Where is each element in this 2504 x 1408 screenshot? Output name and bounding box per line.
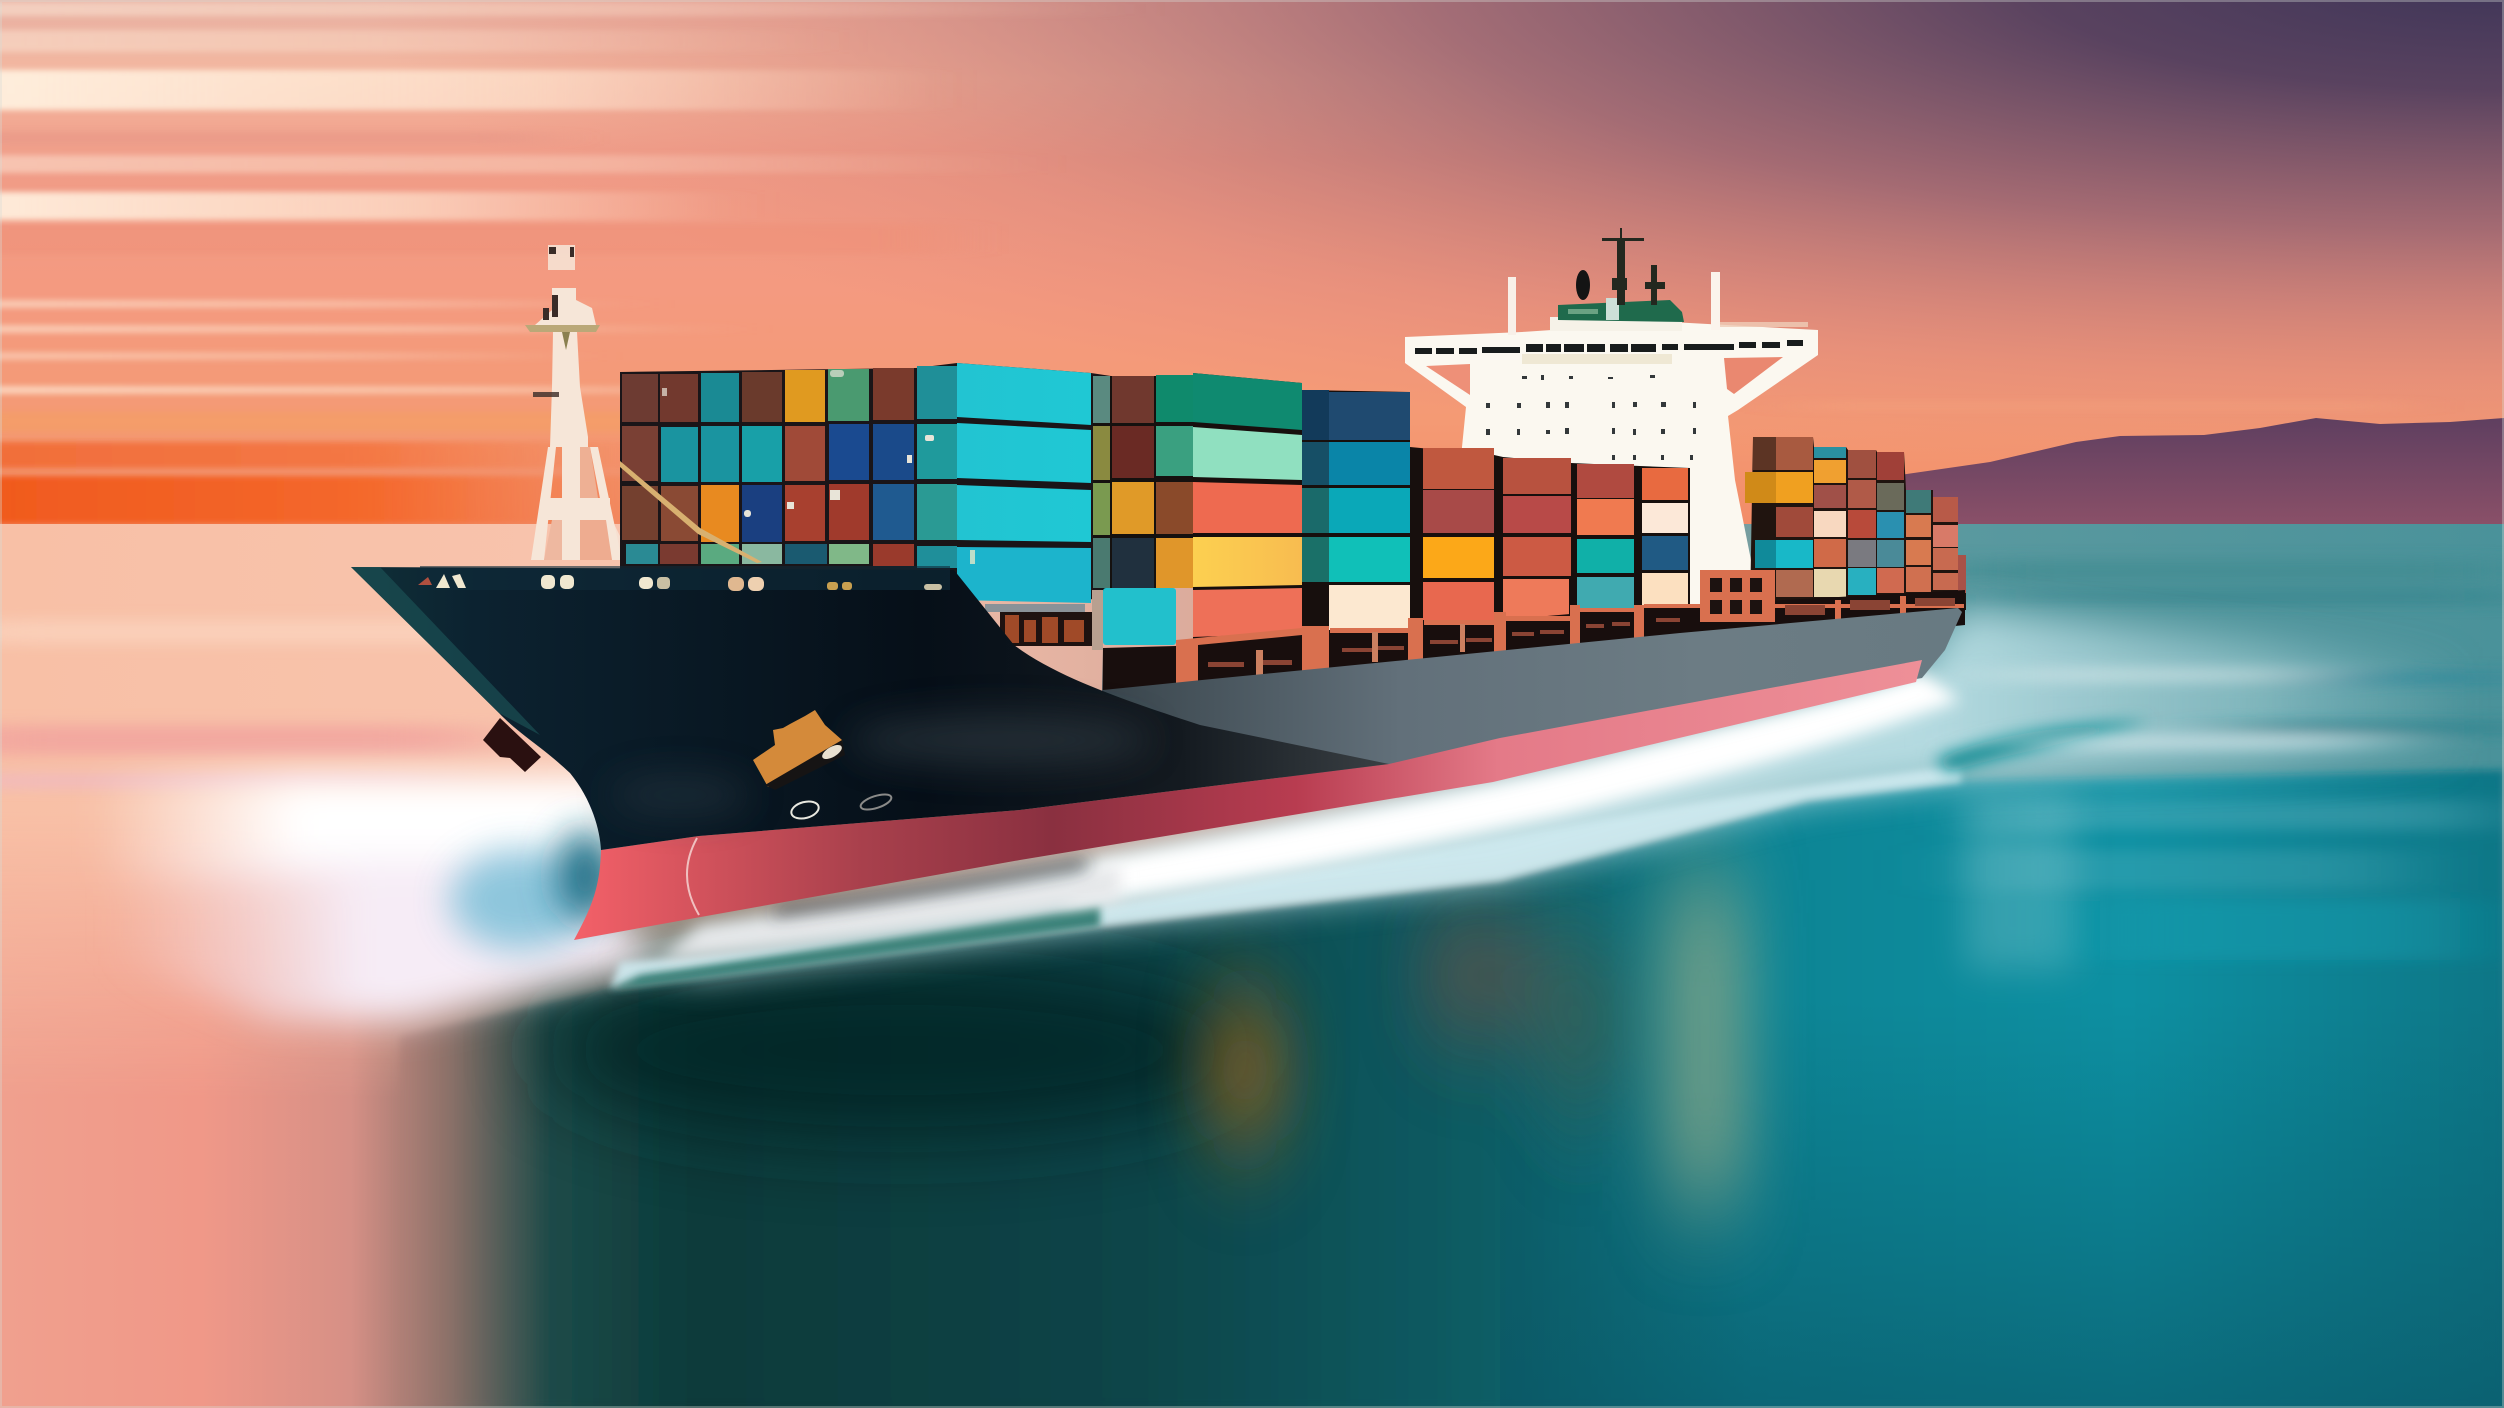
row 4: [626, 544, 658, 564]
bay D: [1503, 458, 1571, 494]
forward container bay: [620, 363, 1193, 612]
row 3: [622, 486, 658, 540]
bridge windows: [1415, 340, 1803, 354]
stern fan: [620, 610, 2460, 975]
grey side: [1100, 608, 1962, 790]
boot-topping: [574, 660, 1922, 940]
bay E: [1577, 464, 1634, 498]
sky: [0, 0, 2504, 526]
black bow: [351, 567, 1389, 850]
anchor: [753, 710, 845, 790]
main mast: [1602, 228, 1665, 305]
small labels: [662, 370, 934, 517]
bay B sides and faces: [1302, 390, 1329, 440]
bay F: [1642, 468, 1688, 500]
hull marks: [789, 791, 893, 821]
second bay stack: [1093, 376, 1193, 588]
wake and foam: [90, 610, 2504, 1020]
water under the wake: [400, 770, 2504, 1408]
aft containers: [1745, 437, 1966, 610]
fender: [483, 718, 541, 772]
sea: [0, 524, 2504, 1408]
bay C: [1423, 448, 1494, 489]
foremast: [525, 245, 632, 560]
bow foam: [90, 775, 660, 1020]
hull stem line: [687, 838, 699, 915]
superstructure: [1405, 228, 1818, 640]
lashing bridge and deck cells: [1000, 570, 1965, 710]
ship reflection: [1195, 880, 1750, 1200]
sky gaps under bridge wings: [1426, 364, 1470, 395]
row 2: [622, 426, 658, 481]
middle container bays: [1103, 373, 1690, 680]
small cyan container: [1103, 588, 1176, 645]
green wheelhouse: [1558, 300, 1684, 322]
portholes: [1486, 375, 1696, 460]
crane arm: [620, 461, 762, 563]
distant mountains: [1900, 418, 2504, 525]
bay A faces: [1193, 373, 1302, 430]
funnel: [1576, 270, 1590, 300]
white wake band: [1060, 672, 1960, 905]
hull: [351, 566, 1962, 940]
radar posts and upper deck: [1508, 277, 1516, 335]
row 1: [622, 374, 658, 422]
forward deck cargo: [1000, 612, 1092, 646]
large cyan containers: [957, 363, 1091, 425]
mooring openings: [418, 574, 942, 591]
